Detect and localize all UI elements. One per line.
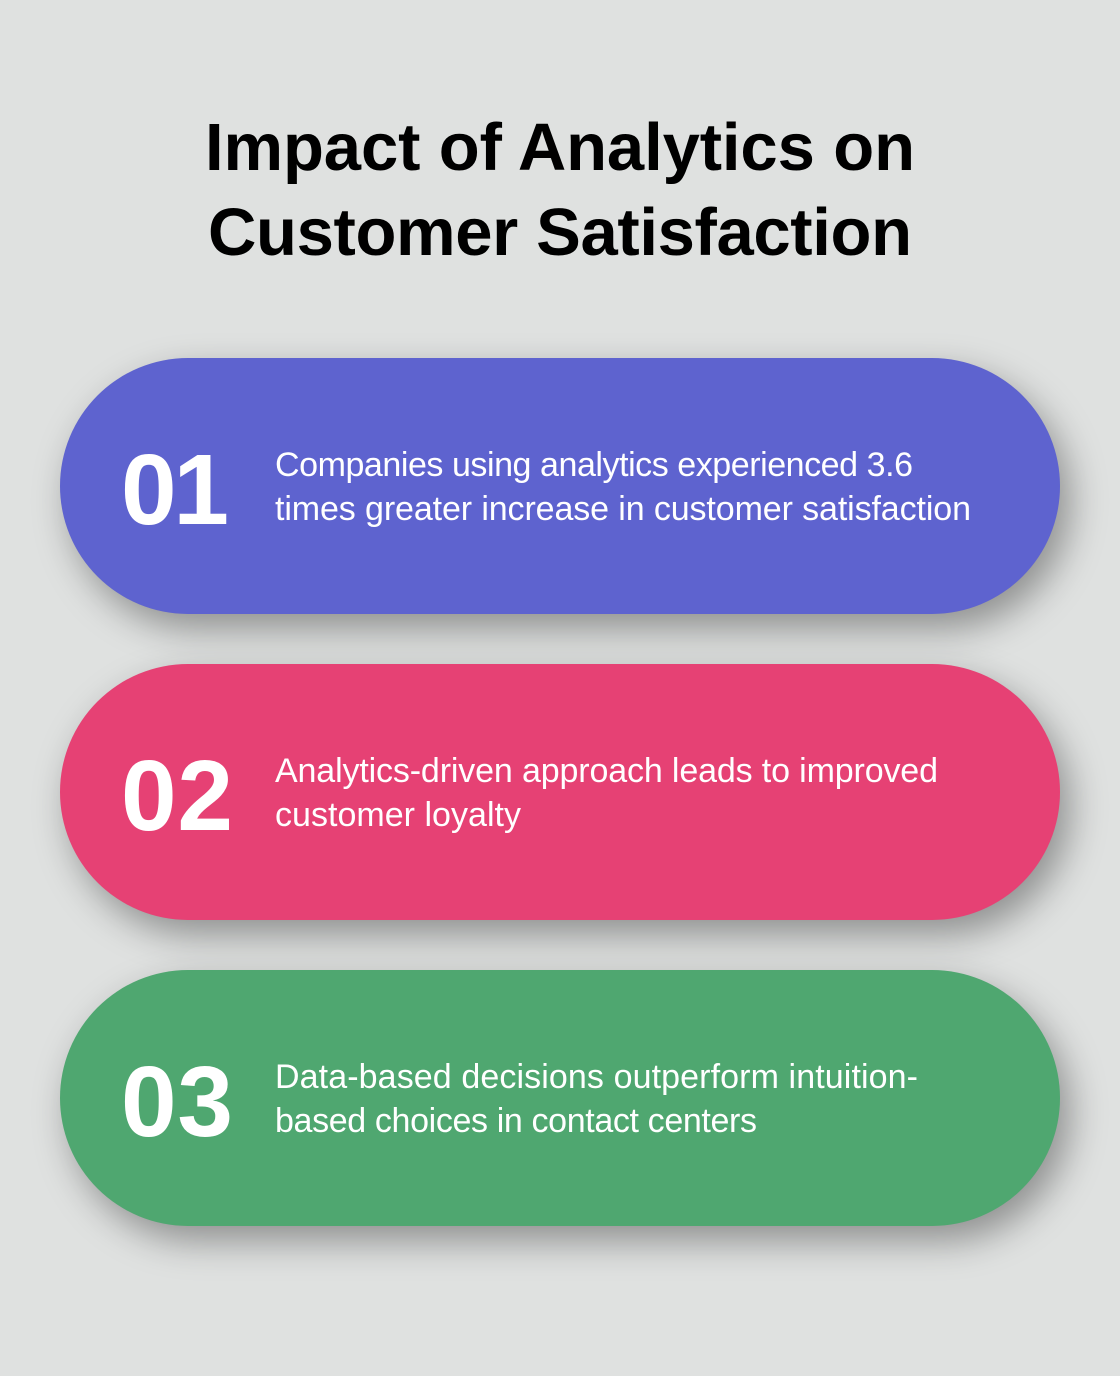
title — [205, 110, 915, 270]
text: card 01: Companies using analytics experienced 3.6 — [275, 446, 913, 484]
text: card 03: Data-based decisions outperform intuition- — [275, 1058, 918, 1096]
text: card 01: times greater increase in customer satisfaction — [275, 490, 971, 528]
panel: card 03 background — [60, 970, 1060, 1226]
text: card 03 — [275, 1058, 918, 1140]
title: Impact of Analytics on — [205, 110, 915, 185]
number 01: 01 — [121, 434, 229, 546]
number 03: 03 — [121, 1046, 233, 1158]
number 02: 02 — [121, 740, 233, 852]
panel: card 01 background — [60, 358, 1060, 614]
text: card 02: Analytics-driven approach leads to improved — [275, 752, 938, 790]
panel: card 02 background — [60, 664, 1060, 920]
text: card 03: based choices in contact centers — [275, 1102, 757, 1140]
text: card 02: customer loyalty — [275, 796, 521, 834]
text: card 02 — [275, 752, 938, 834]
title: Customer Satisfaction — [208, 195, 912, 270]
text: card 01 — [275, 446, 971, 528]
